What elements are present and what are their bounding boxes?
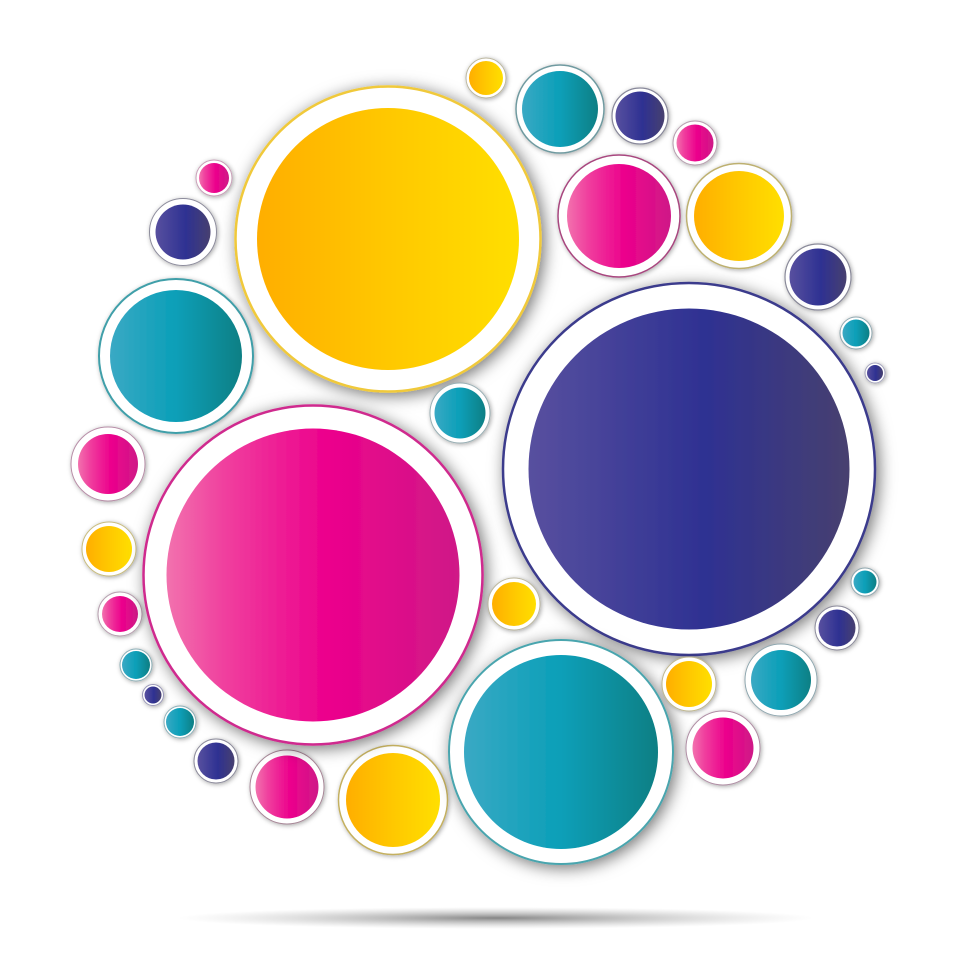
circle: teal lower left small [164,706,196,738]
circle: teal left small [120,649,152,681]
circle: magenta lower right [686,711,760,785]
circle: navy tiny left [142,684,164,706]
circle: magenta medium top [558,155,680,277]
circle: teal medium left [99,279,253,433]
circle: large teal [449,640,673,864]
circle: navy tiny right [865,363,885,383]
circle: large magenta [144,406,482,744]
circle: navy top left [150,198,216,266]
circle: yellow center small [488,578,540,630]
circle: magenta left small [98,592,142,636]
circle: navy lower left [194,739,238,783]
circle: small magenta top left [196,160,232,196]
circle: teal center small [430,383,490,443]
circle: large navy [503,283,875,655]
circle: teal lower right [745,644,817,716]
circle: navy lower right [815,606,859,650]
circle: teal right small [840,317,872,349]
circle: magenta bottom [250,750,324,824]
ground shadow [178,907,814,929]
circle: navy right [785,244,851,310]
circle: yellow lower right [662,657,716,711]
circle: magenta top small [673,121,717,165]
circle: magenta left [71,427,145,501]
circle: yellow medium top [686,164,792,268]
circle: teal far right small [851,568,879,596]
circle: yellow left [82,522,136,576]
circle: yellow bottom [338,746,448,854]
circle: teal top [516,65,604,153]
circle: large yellow [236,86,540,392]
circle: navy top [612,88,668,144]
circle: yellow top small [466,58,506,98]
